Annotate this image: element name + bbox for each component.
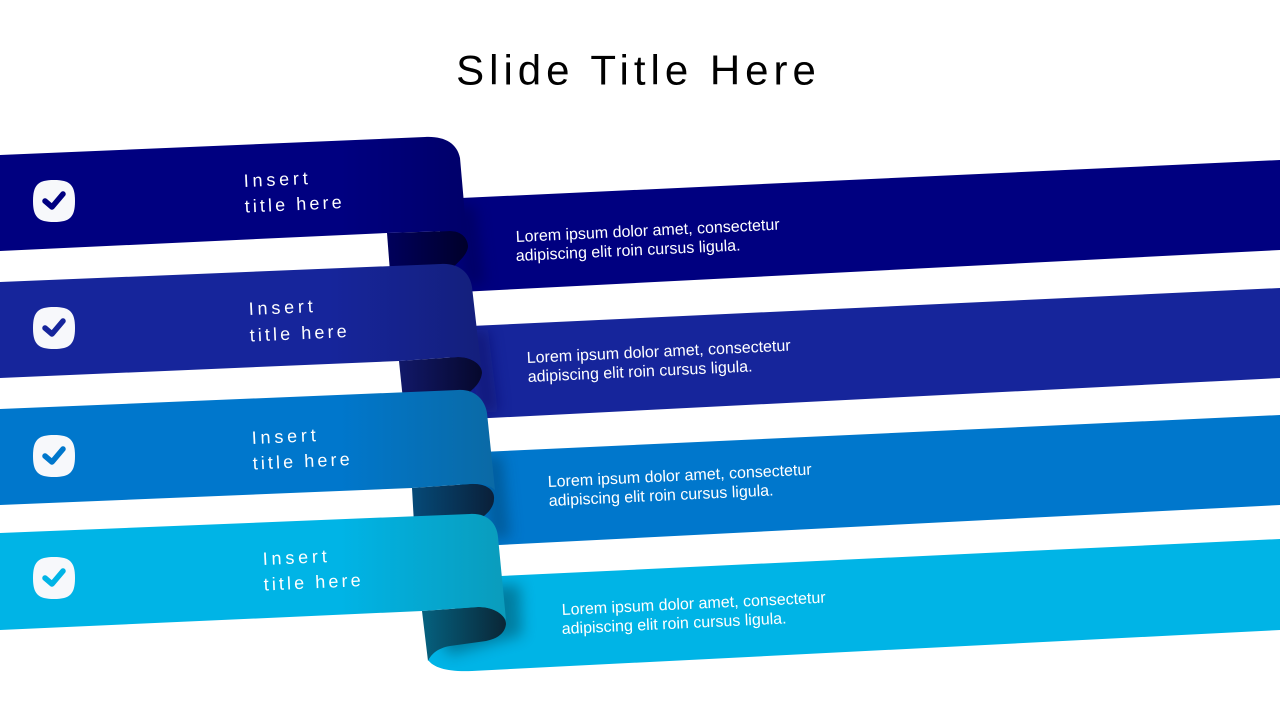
fold 2 <box>399 357 482 400</box>
ribbon 2: front tab <box>0 264 481 378</box>
text block 3 <box>547 462 813 510</box>
text block 1 <box>515 217 781 265</box>
shadow on band 2 <box>468 330 498 412</box>
heading 3: Insert <box>251 425 320 448</box>
fold 3 <box>412 484 494 524</box>
fold 4 <box>422 607 506 661</box>
heading 3: title here <box>252 449 353 473</box>
icon: check 2 <box>33 307 75 349</box>
ribbon 1: front tab <box>0 137 467 251</box>
heading 2 <box>248 296 350 345</box>
heading 3 <box>251 425 353 473</box>
heading 4 <box>262 546 364 594</box>
text block 4: Lorem ipsum dolor amet, consectetur <box>561 590 827 619</box>
heading 2: Insert <box>248 296 317 319</box>
text block 1: Lorem ipsum dolor amet, consectetur <box>515 217 781 246</box>
heading 1: Insert <box>243 168 312 191</box>
heading 1 <box>243 168 345 216</box>
heading 4: Insert <box>262 546 331 569</box>
heading 2: title here <box>249 321 350 345</box>
text block 2: Lorem ipsum dolor amet, consectetur <box>526 338 792 367</box>
ribbon 1: back band <box>440 160 1280 293</box>
text block 1: adipiscing elit roin cursus ligula. <box>515 237 741 265</box>
ribbon 4: back band <box>428 539 1280 671</box>
ribbon 2: back band <box>450 288 1280 420</box>
ribbon 3: back band <box>460 415 1280 547</box>
icon: check 3 <box>33 435 75 477</box>
text block 2: adipiscing elit roin cursus ligula. <box>527 358 753 386</box>
text block 3: Lorem ipsum dolor amet, consectetur <box>547 462 813 491</box>
fold 1 <box>387 231 468 272</box>
shadow on band 1 <box>455 205 485 285</box>
icon: check 4 <box>33 557 75 599</box>
heading 1: title here <box>244 192 345 216</box>
icon: check 1 <box>33 180 75 222</box>
title: Slide Title Here <box>456 46 821 94</box>
shadow on band 4 <box>440 585 522 655</box>
ribbon 4: front tab <box>0 514 506 630</box>
text block 4: adipiscing elit roin cursus ligula. <box>561 610 787 638</box>
text block 2 <box>526 338 792 386</box>
text block 4 <box>561 590 827 638</box>
shadow on band 3 <box>482 456 510 538</box>
text block 3: adipiscing elit roin cursus ligula. <box>548 482 774 510</box>
heading 4: title here <box>263 570 364 594</box>
ribbon 3: front tab <box>0 390 495 505</box>
